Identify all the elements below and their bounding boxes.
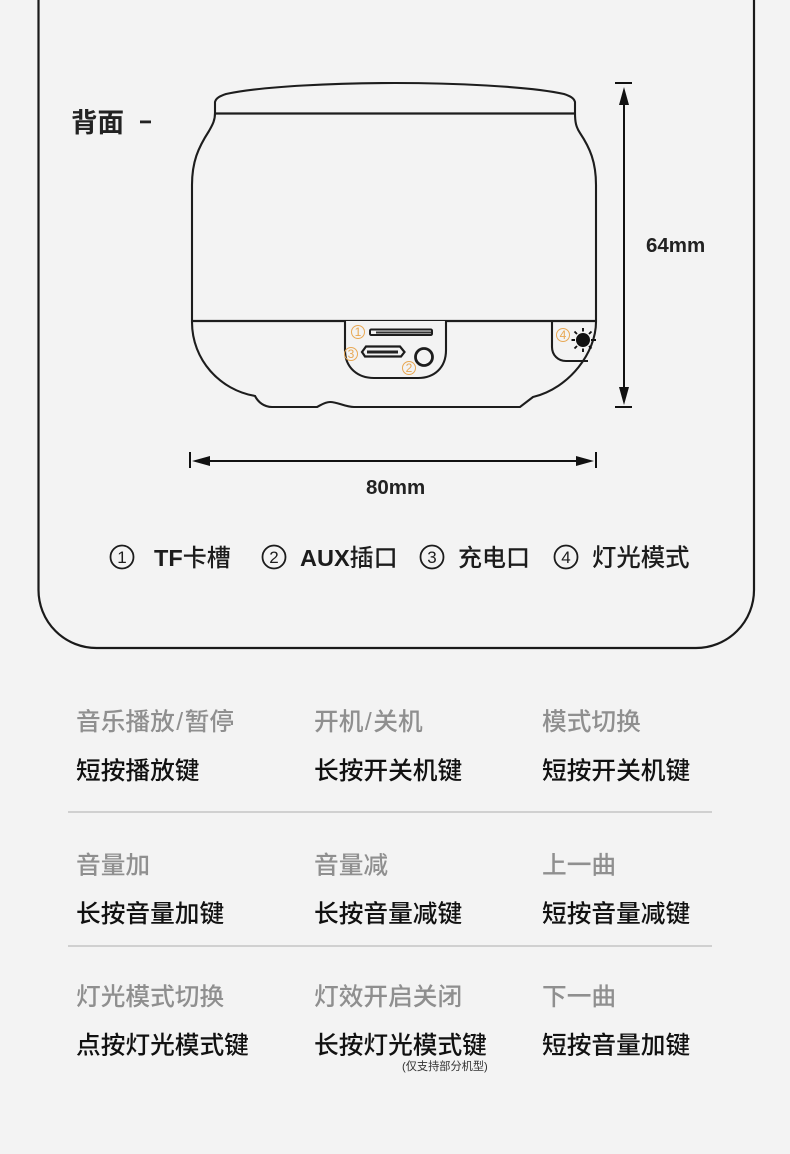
legend item 4: 灯光模式 xyxy=(592,545,690,572)
play/pause: 短按播放键 xyxy=(76,757,199,785)
dimension: height xyxy=(615,83,632,407)
label: 64mm: 64mm xyxy=(646,234,705,257)
legend item 2: AUX插口 xyxy=(300,545,398,572)
mode switch: 模式切换 xyxy=(542,708,641,736)
light on/off xyxy=(314,983,488,1073)
orange number 2: 2 xyxy=(406,361,413,375)
dimension: width xyxy=(190,452,596,468)
legend item 1: 1 xyxy=(117,548,127,567)
heading: back: 背面 xyxy=(71,108,124,138)
light on/off: 灯效开启关闭 xyxy=(314,983,462,1011)
panel: back view xyxy=(38,0,754,648)
icon: sun xyxy=(572,328,596,352)
orange number 4: 4 xyxy=(560,328,567,342)
volume up: 音量加 xyxy=(76,852,150,880)
previous track: 短按音量减键 xyxy=(542,900,690,928)
next track: 短按音量加键 xyxy=(542,1032,690,1060)
light mode switch xyxy=(76,983,249,1060)
legend item 4: 4 xyxy=(561,548,571,567)
power: 开机/关机 xyxy=(314,708,423,736)
power xyxy=(314,708,462,785)
light on/off: (仅支持部分机型) xyxy=(402,1059,488,1073)
USB port xyxy=(362,346,404,356)
legend item 3 xyxy=(420,545,530,572)
play/pause xyxy=(76,708,234,785)
play/pause: 音乐播放/暂停 xyxy=(76,708,234,736)
legend item 3: 3 xyxy=(427,548,437,567)
mode switch: 短按开关机键 xyxy=(542,757,690,785)
heading: back xyxy=(71,108,151,138)
previous track xyxy=(542,852,690,928)
volume up: 长按音量加键 xyxy=(76,900,224,928)
light mode switch: 点按灯光模式键 xyxy=(76,1032,249,1060)
legend item 1: TF卡槽 xyxy=(154,545,231,572)
legend item 3: 充电口 xyxy=(458,545,530,572)
light mode panel xyxy=(552,321,596,361)
previous track: 上一曲 xyxy=(542,852,616,880)
volume down: 长按音量减键 xyxy=(314,900,462,928)
volume down xyxy=(314,852,462,928)
legend item 1 xyxy=(110,545,231,572)
legend item 2: 2 xyxy=(269,548,279,567)
ports panel xyxy=(344,321,446,378)
light mode switch: 灯光模式切换 xyxy=(76,983,224,1011)
volume up xyxy=(76,852,224,928)
legend xyxy=(110,545,690,572)
controls row 3 xyxy=(76,983,690,1073)
next track: 下一曲 xyxy=(542,983,616,1011)
orange number 1: 1 xyxy=(355,325,362,339)
controls row 2 xyxy=(76,852,690,928)
orange number 3: 3 xyxy=(348,347,355,361)
speaker outline xyxy=(192,83,596,407)
mode switch xyxy=(542,708,690,785)
label: 80mm: 80mm xyxy=(366,476,425,499)
light on/off: 长按灯光模式键 xyxy=(314,1032,487,1060)
TF slot xyxy=(370,330,432,335)
power: 长按开关机键 xyxy=(314,757,462,785)
volume down: 音量减 xyxy=(314,852,388,880)
next track xyxy=(542,983,690,1060)
AUX jack xyxy=(416,348,432,366)
controls row 1 xyxy=(76,708,690,785)
